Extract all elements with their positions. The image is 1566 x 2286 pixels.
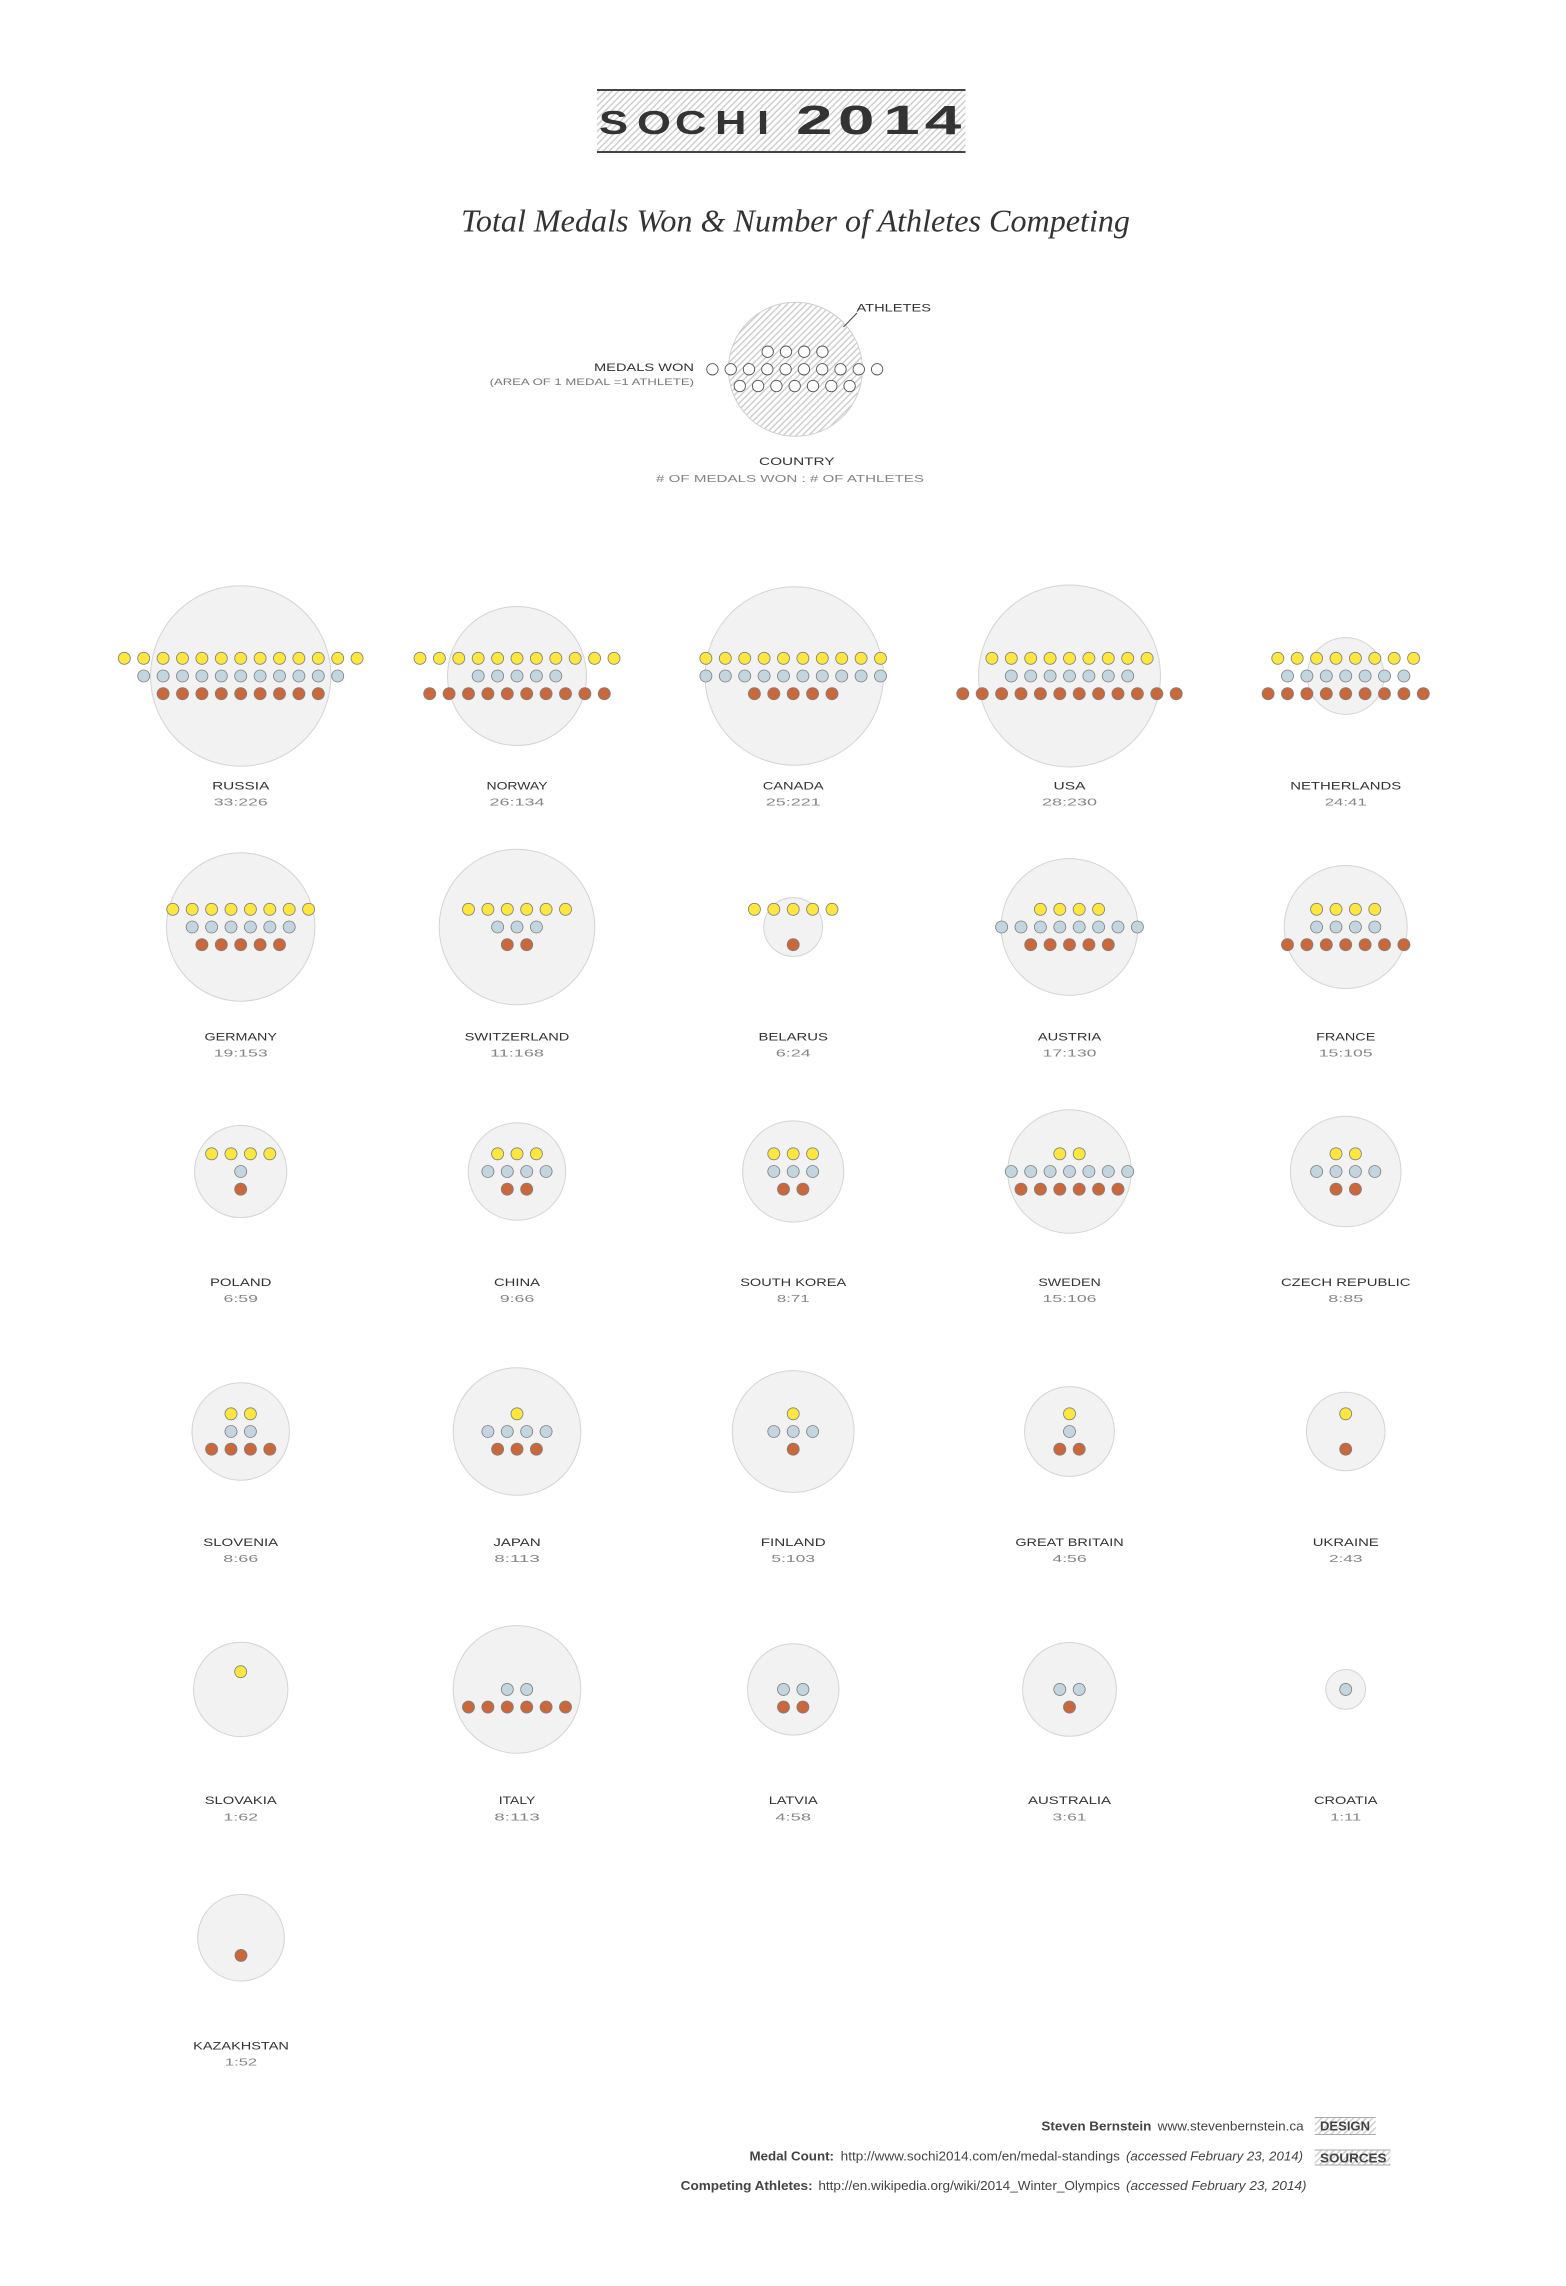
athletes circle [1025, 1387, 1114, 1476]
medals [1054, 1683, 1085, 1713]
name: AUSTRIA [1038, 1032, 1102, 1044]
country: Netherlands [1262, 638, 1429, 809]
competing athletes source: Competing Athletes: [681, 2178, 813, 2193]
medals [1262, 652, 1429, 700]
country: Italy [453, 1626, 581, 1823]
legend: country label: COUNTRY [759, 456, 836, 468]
count: 33:226 [214, 797, 268, 809]
country: Finland [732, 1371, 854, 1565]
country: Ukraine [1306, 1392, 1385, 1565]
medals [482, 1408, 552, 1455]
medal count source: (accessed February 23, 2014) [1126, 2148, 1303, 2164]
count: 8:85 [1328, 1293, 1363, 1305]
legend: medals won label: MEDALS WON [594, 362, 694, 374]
athletes circle [978, 585, 1160, 767]
count: 6:24 [776, 1048, 811, 1060]
legend: ratio note: # OF MEDALS WON : # OF ATHLETES [656, 473, 924, 485]
legend: medals [707, 346, 883, 392]
country: Kazakhstan [193, 1894, 289, 2069]
athletes circle [1284, 866, 1407, 988]
athletes circle [453, 1626, 581, 1753]
legend: athletes label: ATHLETES [856, 303, 931, 315]
count: 3:61 [1052, 1811, 1087, 1823]
country: Slovakia [194, 1642, 288, 1823]
count: 2:43 [1329, 1553, 1363, 1565]
medal count source [750, 2148, 1303, 2164]
name: CZECH REPUBLIC [1281, 1277, 1411, 1289]
country: China [468, 1123, 566, 1305]
medals [996, 903, 1143, 951]
name: KAZAKHSTAN [193, 2041, 289, 2053]
country: Slovenia [192, 1383, 289, 1565]
medals [957, 652, 1182, 700]
country: Czech Republic [1281, 1116, 1411, 1305]
name: AUSTRALIA [1028, 1795, 1112, 1807]
name: POLAND [210, 1277, 272, 1289]
name: FRANCE [1316, 1032, 1375, 1044]
count: 8:66 [223, 1553, 258, 1565]
name: SWITZERLAND [465, 1032, 569, 1044]
competing athletes source [681, 2178, 1306, 2193]
medals [206, 1408, 276, 1455]
country: Australia [1023, 1642, 1116, 1823]
country: France [1282, 866, 1410, 1060]
country: Japan [453, 1368, 581, 1565]
athletes circle [166, 853, 315, 1001]
count: 26:134 [490, 797, 545, 809]
design tag: DESIGN [1320, 2118, 1370, 2134]
count: 15:106 [1042, 1293, 1097, 1305]
name: NETHERLANDS [1290, 781, 1401, 793]
medals [414, 652, 620, 700]
name: SOUTH KOREA [740, 1277, 847, 1289]
count: 28:230 [1042, 797, 1097, 809]
athletes circle [1001, 859, 1138, 995]
country: Latvia [748, 1644, 839, 1823]
athletes circle [453, 1368, 581, 1495]
count: 8:71 [777, 1293, 810, 1305]
name: GREAT BRITAIN [1015, 1537, 1124, 1549]
competing athletes source: http://en.wikipedia.org/wiki/2014_Winter_Olympics [818, 2178, 1120, 2193]
medals [462, 903, 572, 951]
athletes circle [748, 1644, 839, 1735]
athletes circle [448, 606, 586, 746]
athletes circle [764, 898, 823, 956]
count: 11:168 [490, 1048, 544, 1060]
medals [235, 1666, 247, 1678]
country: Norway [414, 606, 620, 809]
count: 19:153 [214, 1048, 268, 1060]
country: Belarus [748, 898, 838, 1060]
count: 1:62 [223, 1811, 258, 1823]
design credit [1041, 2118, 1304, 2134]
name: SLOVENIA [203, 1537, 279, 1549]
country: Switzerland [439, 849, 595, 1060]
count: 17:130 [1042, 1048, 1097, 1060]
legend: area note: (AREA OF 1 MEDAL =1 ATHLETE) [490, 377, 694, 388]
name: RUSSIA [212, 781, 270, 793]
name: GERMANY [204, 1032, 278, 1044]
athletes circle [732, 1371, 854, 1492]
medals [462, 1683, 572, 1713]
name: NORWAY [486, 781, 548, 793]
competing athletes source: (accessed February 23, 2014) [1126, 2178, 1306, 2193]
count: 1:52 [225, 2057, 257, 2069]
athletes circle [198, 1894, 284, 1981]
country: Russia [118, 586, 363, 809]
athletes circle [150, 586, 331, 766]
country: Canada [700, 587, 886, 809]
name: CANADA [763, 781, 825, 793]
name: SLOVAKIA [205, 1795, 278, 1807]
name: CROATIA [1314, 1795, 1378, 1807]
legend: athletes leader line [844, 313, 857, 327]
country: Poland [195, 1125, 287, 1305]
title banner [597, 90, 966, 152]
legend [490, 302, 931, 485]
medals [206, 1148, 276, 1195]
athletes circle [1023, 1642, 1116, 1736]
name: USA [1054, 781, 1086, 793]
count: 4:58 [775, 1811, 811, 1823]
country: Sweden [1005, 1110, 1134, 1305]
medals [1340, 1683, 1352, 1695]
medals [235, 1949, 247, 1961]
country: USA [957, 585, 1182, 809]
athletes circle [194, 1642, 288, 1737]
design credit: www.stevenbernstein.ca [1157, 2118, 1304, 2134]
athletes circle [468, 1123, 566, 1220]
count: 24:41 [1325, 797, 1367, 809]
count: 4:56 [1052, 1553, 1087, 1565]
country: Great Britain [1015, 1387, 1124, 1565]
count: 9:66 [500, 1293, 534, 1305]
medals [768, 1148, 819, 1195]
title banner: 2014 [796, 97, 962, 143]
athletes circle [192, 1383, 289, 1480]
country: Germany [166, 853, 315, 1060]
athletes circle [439, 849, 595, 1005]
count: 5:103 [771, 1553, 815, 1565]
design credit: Steven Bernstein [1041, 2118, 1151, 2134]
name: CHINA [494, 1277, 541, 1289]
athletes circle [195, 1125, 287, 1218]
country: South Korea [740, 1121, 847, 1305]
medals [167, 903, 315, 951]
athletes circle [1008, 1110, 1131, 1233]
medal count source: Medal Count: [750, 2148, 834, 2164]
count: 1:11 [1330, 1811, 1361, 1823]
count: 25:221 [766, 797, 821, 809]
medals [1005, 1148, 1134, 1195]
country: Croatia [1314, 1670, 1378, 1823]
medals [748, 903, 838, 951]
country: Austria [996, 859, 1143, 1060]
name: BELARUS [759, 1032, 828, 1044]
athletes circle [1290, 1116, 1401, 1227]
name: LATVIA [769, 1795, 819, 1807]
athletes circle [743, 1121, 844, 1222]
medals [768, 1408, 819, 1455]
count: 6:59 [223, 1293, 258, 1305]
name: UKRAINE [1313, 1537, 1379, 1549]
medals [700, 652, 886, 700]
athletes circle [705, 587, 883, 765]
count: 15:105 [1319, 1048, 1373, 1060]
medals [482, 1148, 552, 1195]
title banner: SOCHI [599, 105, 769, 142]
name: SWEDEN [1038, 1277, 1101, 1289]
medals [118, 652, 363, 700]
sources tag: SOURCES [1320, 2150, 1387, 2166]
name: FINLAND [761, 1537, 826, 1549]
count: 8:113 [494, 1811, 540, 1823]
medal count source: http://www.sochi2014.com/en/medal-standings [841, 2148, 1120, 2164]
medals [1054, 1408, 1085, 1455]
name: JAPAN [493, 1537, 541, 1549]
count: 8:113 [494, 1553, 540, 1565]
medals [1311, 1148, 1381, 1195]
athletes circle [1306, 1392, 1385, 1471]
medals [1282, 903, 1410, 951]
athletes circle [1307, 638, 1384, 714]
athletes circle [1326, 1670, 1366, 1709]
name: ITALY [499, 1795, 536, 1807]
medals [1340, 1408, 1352, 1455]
medals [778, 1683, 809, 1713]
legend: athletes circle [728, 302, 862, 436]
credits footer [681, 2118, 1390, 2193]
subtitle: Total Medals Won & Number of Athletes Competing [461, 202, 1130, 238]
